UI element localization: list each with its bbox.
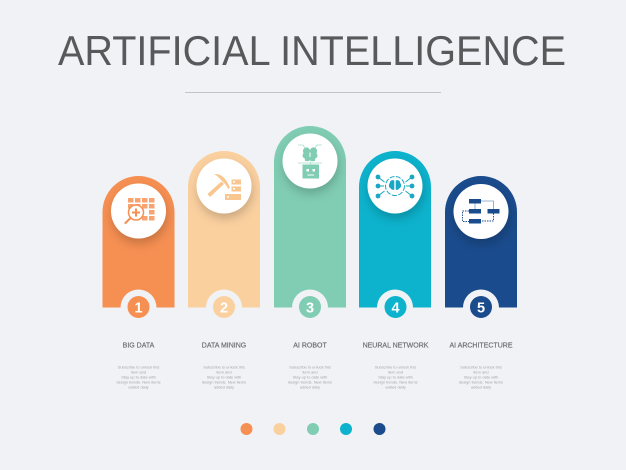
description 4: Subscribe to unlock this <box>375 364 416 370</box>
bar 5 <box>445 176 517 308</box>
description 1: Subscribe to unlock this <box>118 364 159 370</box>
description 2: Subscribe to unlock this <box>203 364 245 370</box>
description 5: Stay up to date with <box>464 374 498 380</box>
description 5: item and <box>473 370 489 374</box>
icon: data grid with magnifier <box>126 198 154 223</box>
icon circle 2 <box>196 158 252 214</box>
description 2: design trends. New items <box>202 380 246 384</box>
bar 4 <box>359 151 431 308</box>
description 1: design trends. New items <box>116 380 161 384</box>
label: ai architecture: AI ARCHITECTURE <box>449 342 513 350</box>
description 4: item and <box>388 370 403 374</box>
panel: big data <box>102 176 174 390</box>
description 5: design trends. New items <box>459 380 503 384</box>
icon circle 1 <box>111 184 166 238</box>
bar 1 <box>102 176 174 308</box>
panel: data mining: 2 <box>220 300 228 316</box>
label: ai robot: AI ROBOT <box>293 342 327 350</box>
number badge 4 <box>384 296 406 318</box>
panel: ai architecture: 5 <box>477 300 485 316</box>
description 5: Subscribe to unlock this <box>460 364 502 370</box>
description 3: Stay up to date with <box>293 374 327 380</box>
bar 3 <box>274 126 346 308</box>
panel: data mining <box>188 151 260 390</box>
icon: pickaxe and server <box>208 174 241 200</box>
icon: brain network <box>376 175 414 198</box>
icon circle 5 <box>454 184 508 239</box>
number badge 1 <box>128 296 150 318</box>
panel: neural network: 4 <box>391 300 400 316</box>
description 1: added daily <box>128 384 149 390</box>
description 4: Stay up to date with <box>378 374 413 380</box>
colour dots legend <box>240 423 386 435</box>
description 2: Stay up to date with <box>207 374 241 380</box>
panel: big data: 1 <box>134 300 143 316</box>
description 4: design trends. New items <box>373 380 418 384</box>
panel: ai robot: 3 <box>306 300 314 316</box>
title: ARTIFICIAL INTELLIGENCE <box>58 27 566 74</box>
description 2: added daily <box>214 384 234 390</box>
panel: ai robot <box>274 126 346 390</box>
bar 2 <box>188 151 260 308</box>
icon: robot with brain <box>298 145 322 178</box>
label: data mining: DATA MINING <box>202 342 246 350</box>
description 3: Subscribe to unlock this <box>289 364 331 370</box>
number badge 3 <box>299 296 321 318</box>
icon circle 4 <box>368 158 422 214</box>
panel: neural network <box>359 151 431 390</box>
panel: ai architecture <box>445 176 517 390</box>
description 1: Stay up to date with <box>121 374 156 380</box>
label: neural network: NEURAL NETWORK <box>363 342 429 350</box>
description 5: added daily <box>471 384 491 390</box>
description 1: item and <box>131 370 146 374</box>
number badge 5 <box>470 296 492 318</box>
icon circle 3 <box>282 134 338 188</box>
label: big data: BIG DATA <box>123 342 155 350</box>
description 3: design trends. New items <box>288 380 332 384</box>
icon: flowchart <box>462 199 500 224</box>
description 2: item and <box>216 370 232 374</box>
description 3: added daily <box>300 384 320 390</box>
description 4: added daily <box>385 384 406 390</box>
description 3: item and <box>302 370 318 374</box>
number badge 2 <box>213 296 235 318</box>
